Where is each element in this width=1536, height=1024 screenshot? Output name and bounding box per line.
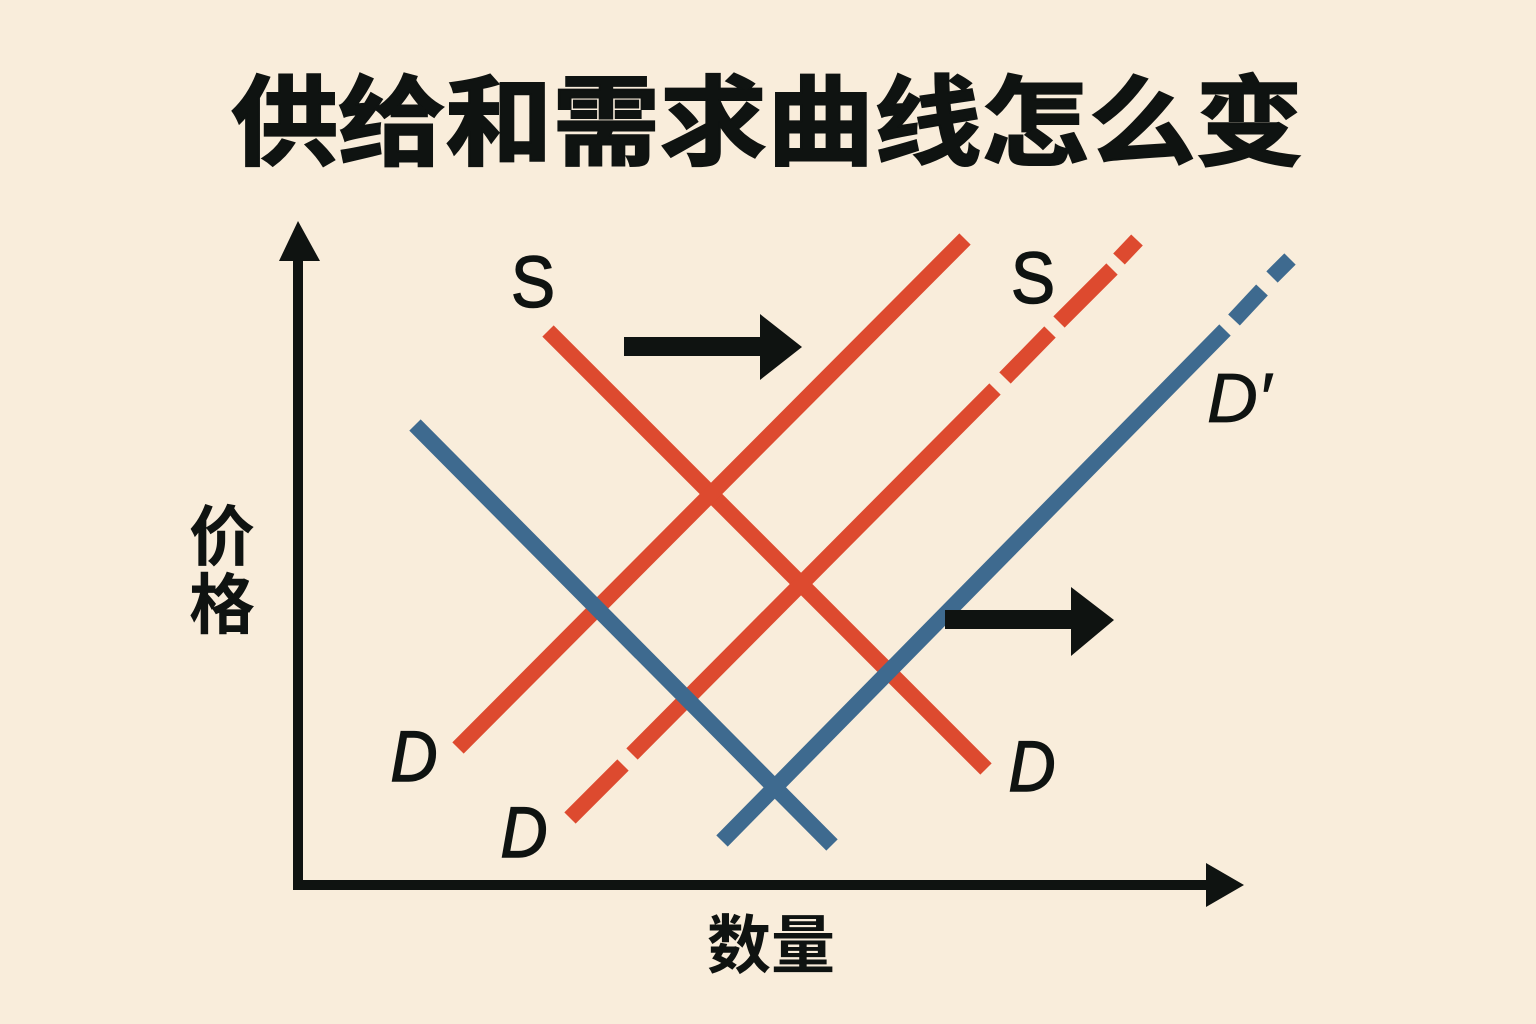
red supply line S descending xyxy=(548,331,986,769)
y axis label: price xyxy=(189,500,255,642)
x axis arrowhead xyxy=(1206,863,1244,907)
title: 供给和需求曲线怎么变 xyxy=(231,68,1303,178)
y axis label: price: 价 xyxy=(189,500,255,574)
label D lower left: D xyxy=(390,718,438,797)
shift arrow for demand xyxy=(945,587,1114,656)
y axis label: price: 格 xyxy=(189,568,255,642)
x axis xyxy=(293,880,1215,890)
blue shifted demand line D' xyxy=(722,259,1290,841)
axes xyxy=(293,250,1215,890)
label S right: S xyxy=(1011,239,1055,319)
red dashed shifted line xyxy=(570,240,1137,818)
blue demand line descending xyxy=(415,425,832,845)
x axis label: quantity: 数量 xyxy=(707,910,835,982)
shift arrow for supply xyxy=(624,314,802,380)
label D right: D xyxy=(1008,728,1056,807)
label D bottom: D xyxy=(500,794,548,873)
label D': D′ xyxy=(1207,359,1274,437)
red line D rising xyxy=(458,239,965,748)
y axis xyxy=(293,250,303,890)
label S left: S xyxy=(511,243,555,323)
y axis arrowhead xyxy=(279,221,320,261)
